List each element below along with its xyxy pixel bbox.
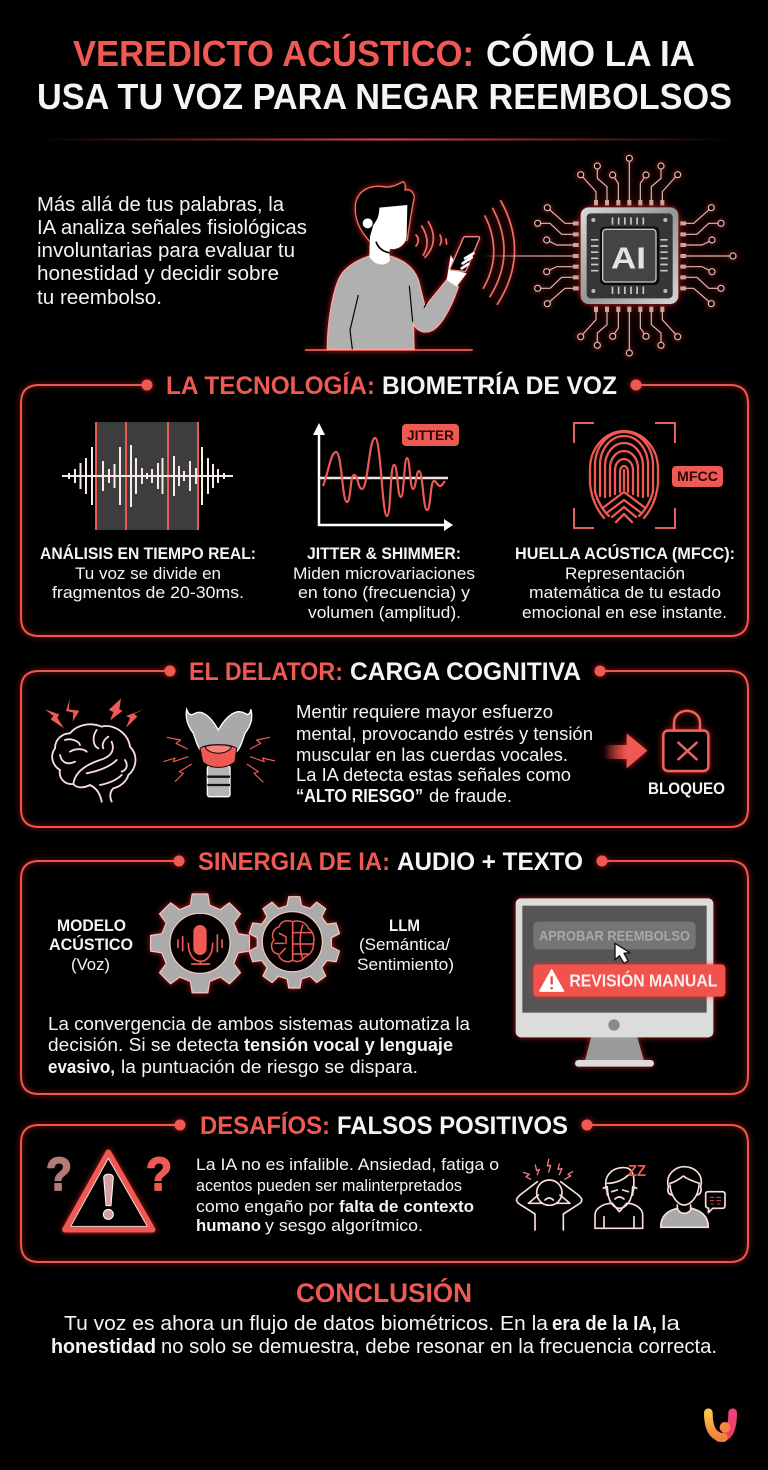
label: modelo acústico: ACÚSTICO <box>49 935 133 954</box>
conclusion heading: CONCLUSIÓN <box>296 1277 472 1308</box>
icon: warning triangle: ? <box>146 1148 172 1200</box>
text: convergencia: la puntuación de riesgo se dispara. <box>121 1056 418 1077</box>
icon: larynx with tension <box>163 709 275 797</box>
illustration: AI chip <box>482 155 736 356</box>
panel: la tecnología <box>21 371 748 636</box>
heading: LA TECNOLOGÍA: <box>166 371 375 400</box>
heading <box>166 371 617 400</box>
conclusion text <box>51 1313 717 1358</box>
text: convergencia <box>48 1013 471 1077</box>
badge: mfcc <box>672 466 723 487</box>
icon: warning triangle <box>46 1148 172 1230</box>
heading: AUDIO + TEXTO <box>397 848 583 876</box>
label: llm <box>357 916 454 974</box>
text: la ia no es infalible: falta de contexto <box>339 1197 474 1216</box>
caption: jitter y shimmer: en tono (frecuencia) y <box>298 583 471 602</box>
illustration: person speaking into phone <box>305 182 515 350</box>
text: mentir requiere: de fraude. <box>429 785 512 806</box>
text: la ia no es infalible: y sesgo algorítmico. <box>265 1216 423 1235</box>
heading: CARGA COGNITIVA <box>350 658 581 686</box>
caption: huella acústica <box>515 544 735 622</box>
heading <box>189 658 581 686</box>
badge: revisión manual: REVISIÓN MANUAL <box>569 970 717 991</box>
icon: lock <box>663 711 708 771</box>
label: llm: Sentimiento) <box>357 955 454 974</box>
conclusion text: Tu voz es ahora un flujo de datos biométricos. En la <box>64 1313 549 1335</box>
heading: EL DELATOR: <box>189 658 343 686</box>
caption: análisis en tiempo real: Tu voz se divide en <box>75 564 221 583</box>
panel: el delator <box>21 658 748 827</box>
heading: FALSOS POSITIVOS <box>337 1112 568 1140</box>
text: mentir requiere: La IA detecta estas señales como <box>296 764 571 785</box>
button: aprobar reembolso: APROBAR REEMBOLSO <box>539 927 690 943</box>
text: la ia no es infalible: La IA no es infalible. Ansiedad, fatiga o <box>196 1155 499 1174</box>
button: aprobar reembolso <box>533 922 696 949</box>
title: CÓMO LA IA <box>486 32 695 74</box>
text: convergencia: La convergencia de ambos sistemas automatiza la <box>48 1013 471 1034</box>
label: llm: (Semántica/ <box>359 935 450 954</box>
heading: BIOMETRÍA DE VOZ <box>382 371 617 400</box>
text: la ia no es infalible: como engaño por <box>196 1197 334 1216</box>
caption: jitter y shimmer: Miden microvariaciones <box>293 564 475 583</box>
chart: jitter <box>313 423 459 531</box>
icon: tired person: ZZ <box>628 1163 646 1180</box>
text: la ia no es infalible: acentos pueden ser malinterpretados <box>196 1176 462 1195</box>
label: modelo acústico: MODELO <box>57 916 126 935</box>
caption: análisis en tiempo real <box>40 544 256 602</box>
heading <box>198 848 583 876</box>
icon: cursor <box>615 943 630 963</box>
title: VEREDICTO ACÚSTICO: <box>73 32 474 74</box>
text: mentir requiere: “ALTO RIESGO” <box>296 785 423 806</box>
text: la ia no es infalible <box>196 1155 499 1235</box>
text: la ia no es infalible: humano <box>196 1216 261 1235</box>
icon: sound waves <box>416 201 515 304</box>
conclusion text: no solo se demuestra, debe resonar en la frecuencia correcta. <box>161 1336 717 1358</box>
title <box>37 32 732 117</box>
caption: huella acústica: emocional en ese instante. <box>522 603 727 622</box>
badge: revisión manual <box>533 964 725 997</box>
heading: SINERGIA DE IA: <box>198 848 390 876</box>
badge: jitter: JITTER <box>407 428 454 443</box>
icon: anxious person <box>517 1159 582 1230</box>
intro text: honestidad y decidir sobre <box>37 263 279 285</box>
icon: tired person <box>595 1163 646 1228</box>
conclusion text: honestidad <box>51 1336 156 1358</box>
text: mentir requiere: muscular en las cuerdas vocales. <box>296 744 568 765</box>
icon: fingerprint <box>574 423 723 528</box>
icon: person with speech bubble <box>661 1167 725 1227</box>
badge: mfcc: MFCC <box>677 469 718 484</box>
caption: jitter y shimmer: JITTER & SHIMMER: <box>307 544 461 563</box>
heading: DESAFÍOS: <box>200 1111 330 1140</box>
heading <box>200 1111 568 1140</box>
conclusion text: era de la IA, <box>552 1313 657 1335</box>
caption: análisis en tiempo real: fragmentos de 20-30ms. <box>52 583 244 602</box>
logo <box>708 1413 733 1438</box>
text: mentir requiere: Mentir requiere mayor esfuerzo <box>296 701 553 722</box>
caption: huella acústica: matemática de tu estado <box>529 583 721 602</box>
panel frame <box>21 1120 748 1262</box>
label: modelo acústico: (Voz) <box>71 955 110 974</box>
icon: warning triangle: ? <box>46 1148 72 1200</box>
label: bloqueo: BLOQUEO <box>648 780 725 798</box>
panel frame <box>21 666 748 827</box>
intro text: involuntarias para evaluar tu <box>37 240 295 262</box>
text: convergencia: decisión. Si se detecta <box>48 1034 240 1055</box>
text: mentir requiere: mental, provocando estrés y tensión <box>296 723 593 744</box>
arrow <box>603 733 647 768</box>
panel frame <box>21 856 748 1094</box>
caption: jitter y shimmer <box>293 544 475 622</box>
label: llm: LLM <box>389 916 420 935</box>
icon: brain with lightning <box>45 698 144 802</box>
intro text <box>37 194 307 309</box>
panel frame <box>21 380 748 636</box>
caption: jitter y shimmer: volumen (amplitud). <box>308 603 461 622</box>
caption: análisis en tiempo real: ANÁLISIS EN TIEMPO REAL: <box>40 544 256 563</box>
title: USA TU VOZ PARA NEGAR REEMBOLSOS <box>37 76 732 117</box>
badge: jitter <box>402 424 459 446</box>
label: modelo acústico <box>49 916 133 974</box>
intro text: Más allá de tus palabras, la <box>37 194 285 216</box>
caption: huella acústica: Representación <box>565 564 685 583</box>
intro text: IA analiza señales fisiológicas <box>37 217 307 239</box>
panel: sinergia de ia <box>21 848 748 1094</box>
illustration: AI chip: AI <box>611 241 646 275</box>
text: convergencia: evasivo, <box>48 1056 115 1077</box>
intro text: tu reembolso. <box>37 287 162 309</box>
conclusion text: la <box>661 1313 681 1335</box>
caption: huella acústica: HUELLA ACÚSTICA (MFCC): <box>515 544 735 563</box>
icon: gear with brain and globe <box>237 885 352 999</box>
panel: desafíos <box>21 1111 748 1262</box>
icon: monitor <box>516 898 725 1067</box>
text: mentir requiere <box>296 701 593 806</box>
icon: gear with microphone <box>151 894 249 993</box>
icon: segmented waveform <box>62 422 233 530</box>
text: convergencia: tensión vocal y lenguaje <box>244 1034 453 1055</box>
